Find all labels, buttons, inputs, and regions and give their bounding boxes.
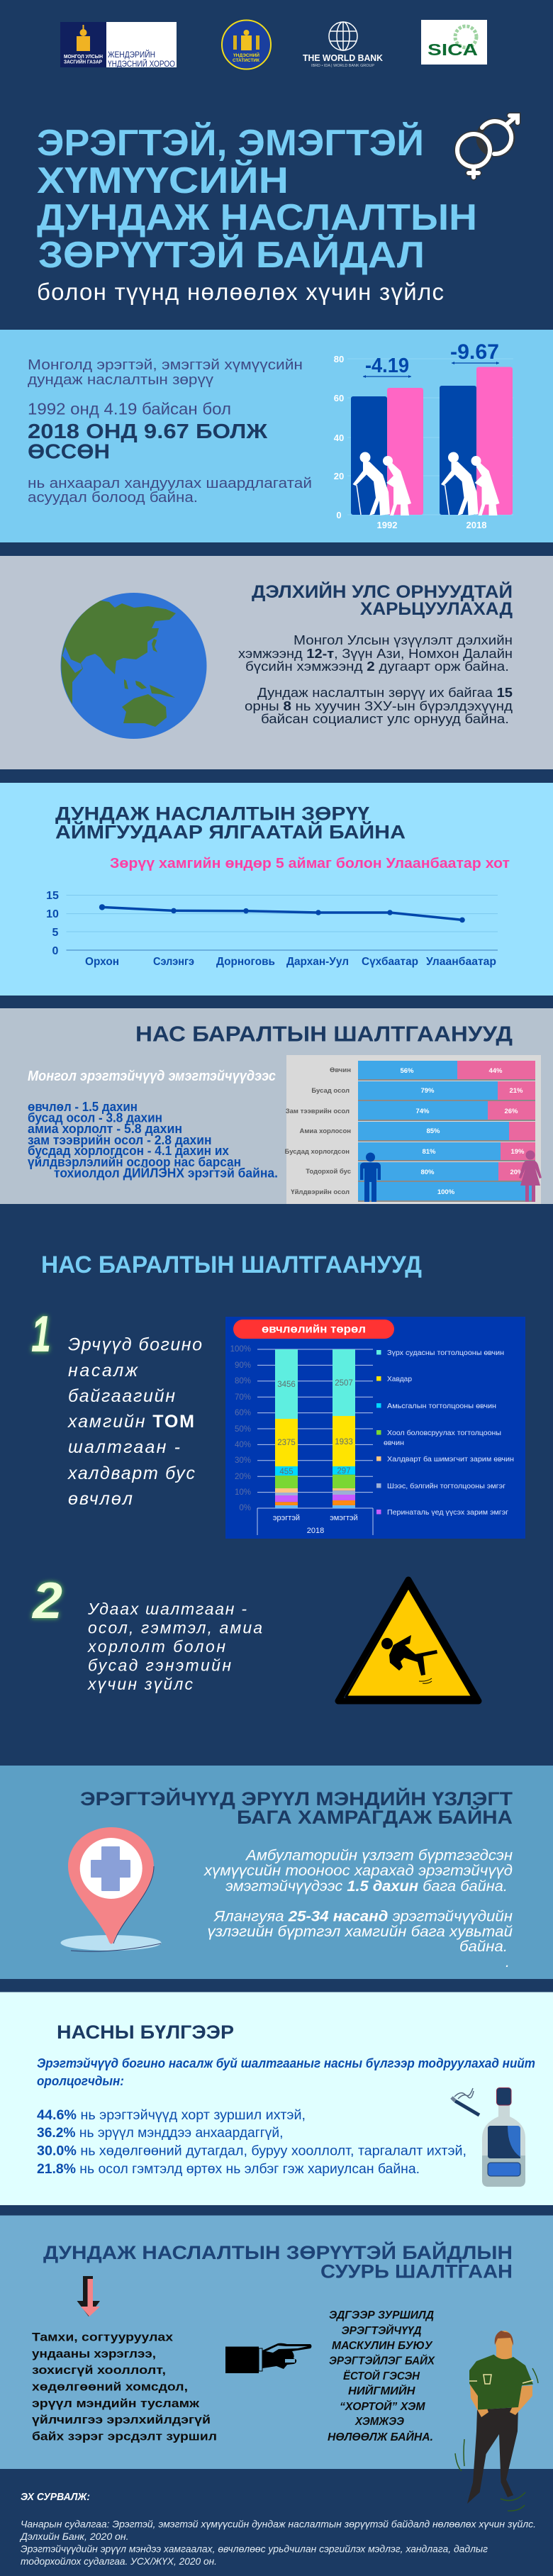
logo: gender committee xyxy=(60,22,177,69)
stacked chart: disease types: 50% xyxy=(235,1425,251,1434)
bar chart: share of deaths by sex xyxy=(285,1055,542,1204)
stacked chart: disease types: 60% xyxy=(235,1409,251,1417)
arrow: down xyxy=(77,2276,100,2316)
panel: world comparison xyxy=(0,556,553,769)
stacked chart: disease types: 70% xyxy=(235,1393,251,1402)
list: ratios: бусад осол - 3.8 дахин xyxy=(28,1110,162,1125)
text: reason one: шалтгаан - xyxy=(68,1437,180,1457)
text: reason one: байгаагийн xyxy=(68,1386,175,1406)
text block: world ranking: орны 8 нь хуучин ЗХУ-ын бүрэлдэхүүнд xyxy=(245,699,513,713)
line chart: gap by aimag: 15 xyxy=(46,890,59,902)
legend: disease types xyxy=(376,1349,514,1517)
title: ЗӨРҮҮТЭЙ БАЙДАЛ xyxy=(38,234,425,276)
text: source list: тодорхойлох судалгаа. УСХ/ЖҮХ, 2020 он. xyxy=(21,2555,217,2567)
heading: causes of death dark section: НАС БАРАЛТЫН ШАЛТГААНУУД xyxy=(41,1251,422,1278)
stacked chart: disease types: 3456 xyxy=(277,1381,296,1389)
bar chart: share of deaths by sex: Тодорхой бус xyxy=(306,1168,351,1176)
text: masculinity norms: ЁСТОЙ ГЭСЭН xyxy=(343,2368,420,2382)
heading: world comparison xyxy=(252,581,513,619)
icon: woman xyxy=(519,1150,542,1202)
label: disease type pill xyxy=(233,1320,394,1339)
text: reason two xyxy=(87,1600,262,1693)
heading: health checks: ЭРЭГТЭЙЧҮҮД ЭРҮҮЛ МЭНДИЙН ҮЗЛЭГТ xyxy=(80,1788,513,1810)
heading: aimag differences: ДУНДАЖ НАСЛАЛТЫН ЗӨРҮҮ xyxy=(55,803,370,824)
text: age group intro xyxy=(37,2056,535,2088)
text block: gap intro: 2018 ОНД 9.67 БОЛЖ xyxy=(28,420,268,443)
list: risk percentages: 36.2% нь эрүүл мэнддээ анхаардаггүй, xyxy=(37,2126,284,2141)
text block: gap intro xyxy=(28,357,312,506)
line chart: gap by aimag: 10 xyxy=(46,908,59,920)
legend: disease types: Перинаталь үед үүсэх зарим эмгэг xyxy=(387,1508,508,1517)
logo: gender committee: ЖЕНДЭРИЙН xyxy=(108,49,155,60)
list: ratios: амиа хорлолт - 5.8 дахин xyxy=(28,1122,182,1136)
list: ratios: зам тээврийн осол - 2.8 дахин xyxy=(28,1133,211,1147)
panel: root causes xyxy=(0,2215,553,2469)
bar chart: share of deaths by sex: 80% xyxy=(420,1169,435,1176)
label: disease type pill: өвчлөлийн төрөл xyxy=(262,1323,366,1336)
stacked chart: disease types: 0% xyxy=(239,1504,251,1512)
icon: elderly couple 2018 xyxy=(441,452,499,515)
stacked chart: disease types: 90% xyxy=(235,1361,251,1370)
numeral 1: 1 xyxy=(31,1306,51,1363)
text: health check details: Ялангуяа 25-34 насанд эрэгтэйчүүдийн xyxy=(213,1909,513,1924)
line chart: gap by aimag: 5 xyxy=(52,927,59,939)
illustration: standing man xyxy=(455,2331,538,2511)
list: ratios: өвчлөл - 1.5 дахин xyxy=(28,1100,138,1114)
text: age group intro: Эрэгтэйчүүд богино насалж буй шалтгааныг насны бүлгээр тодруулахад нийт xyxy=(37,2056,535,2070)
stacked chart: disease types: 2507 xyxy=(335,1379,353,1388)
heading: causes of death: НАС БАРАЛТЫН ШАЛТГААНУУД xyxy=(135,1021,513,1047)
line chart: gap by aimag: Орхон xyxy=(85,956,119,968)
stacked chart: disease types: 455 xyxy=(279,1468,294,1476)
text: masculinity norms: МАСКУЛИН БУЮУ xyxy=(332,2340,433,2352)
bar chart: share of deaths by sex: 26% xyxy=(504,1108,518,1115)
legend: disease types: өвчин xyxy=(384,1439,404,1447)
bar chart: share of deaths by sex: 85% xyxy=(426,1127,440,1135)
list: ratios xyxy=(28,1100,278,1180)
bar chart: life expectancy by sex: 1992 xyxy=(377,520,397,530)
panel: aimag differences xyxy=(0,783,553,996)
text: risky habits: зохисгүй хооллолт, xyxy=(32,2363,166,2377)
text: source list: Дэлхийн Банк, 2020 он. xyxy=(19,2531,128,2542)
text block: gap intro: дундаж наслалтын зөрүү xyxy=(28,372,213,388)
list: risk percentages xyxy=(37,2108,467,2177)
text block: world ranking: Монгол Улсын үзүүлэлт дэлхийн xyxy=(294,633,513,647)
logo: SICA: SICA xyxy=(428,40,478,59)
text: masculinity norms: НӨЛӨӨЛЖ БАЙНА. xyxy=(328,2429,433,2443)
heading: aimag differences: АЙМГУУДААР ЯЛГААТАЙ БАЙНА xyxy=(55,821,406,842)
stacked chart: disease types: 100% xyxy=(230,1345,251,1354)
text: source list: Чанарын судалгаа: Эрэгтэй, эмэгтэй хүмүүсийн дундаж наслалтын зөрүүтэй байдалд нөлөөлөх хүчин зүйлс. xyxy=(21,2519,536,2530)
bar chart: life expectancy by sex: 40 xyxy=(334,433,344,443)
bar chart: share of deaths by sex: 20% xyxy=(510,1169,524,1176)
stacked chart: disease types: 20% xyxy=(235,1473,251,1481)
icon: slip warning sign xyxy=(338,1580,479,1701)
text: age group intro: оролцогчдын: xyxy=(37,2074,124,2088)
label: gap 1992: -4.19 xyxy=(365,355,409,377)
text: health check details: хүмүүсийн тооноос харахад эрэгтэйчүүд xyxy=(203,1863,513,1879)
text block: gap intro: ӨССӨН xyxy=(28,441,110,464)
text: reason two: Удаах шалтгаан - xyxy=(87,1600,247,1618)
logo: national statistics: СТАТИСТИК xyxy=(233,58,259,63)
text: risky habits: байх зэрэг эрсдэлт зуршил xyxy=(32,2429,217,2443)
bar chart: share of deaths by sex: Бусдад хорлогдсон xyxy=(285,1148,350,1156)
panel: sources xyxy=(0,2469,553,2576)
title: ДУНДАЖ НАСЛАЛТЫН xyxy=(37,197,477,238)
text: masculinity norms: “ХОРТОЙ” ХЭМ xyxy=(340,2399,425,2413)
panel: causes of death by sex xyxy=(0,1008,553,1204)
logo: SICA xyxy=(421,20,487,65)
logo: gender committee: МОНГОЛ УЛСЫН xyxy=(64,53,103,60)
text block: world ranking: Дундаж наслалтын зөрүү их байгаа 15 xyxy=(257,686,513,700)
icon: cigarette xyxy=(452,2088,479,2115)
bar: male xyxy=(275,1349,298,1508)
text: reason one: насалж xyxy=(68,1361,139,1381)
icon: medical location pin xyxy=(61,1827,162,1951)
list: risk percentages: 30.0% нь хөдөлгөөний дутагдал, буруу хооллолт, таргалалт ихтэй, xyxy=(37,2144,467,2158)
text: risky habits xyxy=(32,2330,217,2443)
logo: national statistics: ҮНДЭСНИЙ xyxy=(233,52,259,58)
logo: world bank: THE WORLD BANK xyxy=(303,52,384,63)
stacked chart: disease types: эмэгтэй xyxy=(330,1514,358,1522)
text: risky habits: Тамхи, согтууруулах xyxy=(32,2330,174,2344)
heading: health checks xyxy=(80,1788,513,1828)
stacked chart: disease types: 30% xyxy=(235,1456,251,1465)
icon: gender symbols xyxy=(457,116,518,177)
text: risky habits: үйлчилгээ эрэлхийлдэгүй xyxy=(32,2413,211,2426)
icon: globe xyxy=(61,593,207,739)
line chart: gap by aimag: Сэлэнгэ xyxy=(153,956,194,968)
bar chart: life expectancy by sex: 60 xyxy=(334,393,344,403)
bar chart: share of deaths by sex: 56% xyxy=(400,1067,414,1075)
list: risk percentages: 44.6% нь эрэгтэйчүүд хорт зуршил ихтэй, xyxy=(37,2108,306,2123)
logo: national statistics xyxy=(222,20,271,69)
logo: gender committee: ҮНДЭСНИЙ ХОРОО xyxy=(108,58,175,69)
logo: world bank xyxy=(303,22,384,68)
text: reason one xyxy=(67,1334,202,1509)
text block: gap intro: 1992 онд 4.19 байсан бол xyxy=(28,400,231,418)
logo: world bank: IBRD • IDA | WORLD BANK GROUP xyxy=(311,64,374,68)
text: health check details xyxy=(203,1848,513,1970)
text: reason two: осол, гэмтэл, амиа xyxy=(88,1618,262,1637)
bar chart: life expectancy by sex: 80 xyxy=(334,354,344,364)
bar chart: share of deaths by sex: 44% xyxy=(488,1067,503,1075)
line chart: gap by aimag: Улаанбаатар xyxy=(426,956,496,968)
text: masculinity norms: ЭРЭГТЭЙЧҮҮД xyxy=(342,2323,422,2337)
text: reason two: бусад гэнэтийн xyxy=(88,1656,231,1675)
subheading: top five aimags: Зөрүү хамгийн өндөр 5 аймаг болон Улаанбаатар хот xyxy=(110,856,510,871)
list: ratios: үйлдвэрлэлийн ослоор нас барсан xyxy=(28,1155,241,1169)
text: risky habits: ундааны хэрэглээ, xyxy=(32,2347,156,2360)
title: ХҮМҮҮСИЙН xyxy=(37,160,289,201)
text: source list: Эрэгтэйчүүдийн эрүүл мэндээ хамгаалах, өвчлөлөөс урьдчилан сэргийлэх мэдлэг, хандлага, дадлыг xyxy=(21,2543,488,2554)
text block: gap intro: Монголд эрэгтэй, эмэгтэй хүмүүсийн xyxy=(28,357,303,373)
legend: disease types: Хавдар xyxy=(387,1375,412,1383)
stacked chart: disease types: 297 xyxy=(337,1467,351,1476)
text block: world ranking: хэмжээнд 12-т, Зүүн Ази, Номхон Далайн xyxy=(238,647,513,661)
bar chart: share of deaths by sex: Зам тээврийн осол xyxy=(286,1108,350,1115)
stacked chart: disease types: 1933 xyxy=(335,1438,353,1446)
text block: world ranking: байсан социалист улс орнууд байна. xyxy=(261,712,509,726)
text: risky habits: хөдөлгөөний хомсдол, xyxy=(32,2380,188,2394)
text: health check details: . xyxy=(505,1954,510,1970)
bar chart: share of deaths by sex: 100% xyxy=(437,1188,455,1196)
text block: gap intro: асуудал болоод байна. xyxy=(28,490,198,506)
heading: world comparison: ДЭЛХИЙН УЛС ОРНУУДТАЙ xyxy=(252,581,513,602)
text: health check details: байна. xyxy=(459,1939,508,1955)
bar chart: share of deaths by sex: 21% xyxy=(509,1087,523,1095)
text: masculinity norms: ЭРЭГТЭЙЛЭГ БАЙХ xyxy=(329,2353,435,2367)
list: ratios: тохиолдол ДИЙЛЭНХ эрэгтэй байна. xyxy=(54,1166,278,1180)
numeral 2: 2 xyxy=(31,1573,62,1629)
bar chart: life expectancy by sex: 0 xyxy=(336,510,342,520)
stacked chart: disease types xyxy=(225,1317,525,1539)
line chart: gap by aimag: Сүхбаатар xyxy=(362,956,418,968)
bar chart: life expectancy by sex: 2018 xyxy=(467,520,486,530)
label: gap 2018: -9.67 xyxy=(450,340,499,364)
heading: aimag differences xyxy=(55,803,406,842)
heading: age groups: НАСНЫ БҮЛГЭЭР xyxy=(57,2022,234,2043)
icon: pointing hand xyxy=(225,2343,312,2373)
text block: gap intro: нь анхаарал хандуулах шаардлагатай xyxy=(28,476,312,491)
line chart: gap by aimag: Дорноговь xyxy=(216,956,275,968)
line chart: gap by aimag xyxy=(46,890,498,968)
text: men versus women intro: Монгол эрэгтэйчүүд эмэгтэйчүүдээс xyxy=(28,1069,276,1084)
stacked chart: disease types: 2018 xyxy=(307,1527,324,1535)
text: health check details: Амбулаторийн үзлэгт бүртгэгдсэн xyxy=(245,1848,513,1863)
text: reason one: халдварт бус xyxy=(67,1463,196,1483)
bar chart: life expectancy by sex xyxy=(334,340,513,530)
panel: health check coverage xyxy=(0,1766,553,1979)
bar chart: share of deaths by sex: 19% xyxy=(510,1148,525,1156)
text: masculinity norms xyxy=(328,2309,435,2443)
stacked chart: disease types: 10% xyxy=(235,1488,251,1497)
bar chart: share of deaths by sex: 74% xyxy=(415,1108,430,1115)
bar chart: share of deaths by sex: 79% xyxy=(420,1087,435,1095)
line chart: gap by aimag: Дархан-Уул xyxy=(286,956,349,968)
heading: root causes: СУУРЬ ШАЛТГААН xyxy=(320,2260,513,2282)
text: reason two: хорлолт болон xyxy=(87,1637,225,1656)
bar: female xyxy=(333,1349,355,1508)
heading: sources: ЭХ СУРВАЛЖ: xyxy=(21,2491,90,2503)
line chart: gap by aimag: 0 xyxy=(52,945,59,957)
stacked chart: disease types: 40% xyxy=(235,1441,251,1449)
text: health check details: үзлэгийн бүртгэл хамгийн бага хувьтай xyxy=(207,1924,513,1940)
text: health check details: эмэгтэйчүүдээс 1.5 дахин бага байна. xyxy=(225,1878,508,1895)
list: ratios: бусдад хорлогдсон - 4.1 дахин их xyxy=(28,1144,229,1158)
text: reason one: хамгийн ТОМ xyxy=(67,1412,194,1432)
bar chart: share of deaths by sex: Өвчин xyxy=(330,1066,351,1074)
text: reason one: Эрчүүд богино xyxy=(68,1334,202,1354)
panel: life expectancy gap xyxy=(0,330,553,542)
heading: root causes: ДУНДАЖ НАСЛАЛТЫН ЗӨРҮҮТЭЙ БАЙДЛЫН xyxy=(43,2241,513,2263)
text: reason two: хүчин зүйлс xyxy=(87,1675,193,1693)
text: risky habits: эрүүл мэндийн тусламж xyxy=(32,2397,200,2410)
stacked chart: disease types: 80% xyxy=(235,1377,251,1385)
text: reason one: өвчлөл xyxy=(68,1489,133,1509)
logo: gender committee: ЗАСГИЙН ГАЗАР xyxy=(64,58,102,65)
text: masculinity norms: ЭДГЭЭР ЗУРШИЛД xyxy=(329,2309,434,2321)
stacked chart: disease types: эрэгтэй xyxy=(273,1514,300,1522)
heading: world comparison: ХАРЬЦУУЛАХАД xyxy=(360,599,513,619)
icon: elderly couple 1992 xyxy=(353,452,411,515)
icon: bottle xyxy=(482,2087,525,2187)
legend: disease types: Хоол боловсруулах тогтолцооны xyxy=(387,1429,501,1437)
title: ЭРЭГТЭЙ, ЭМЭГТЭЙ xyxy=(37,122,424,164)
panel: age groups xyxy=(0,1992,553,2205)
heading: root causes xyxy=(43,2241,513,2282)
bar chart: life expectancy by sex: 20 xyxy=(334,471,344,481)
text: masculinity norms: НИЙГМИЙН xyxy=(348,2383,415,2397)
heading: health checks: БАГА ХАМРАГДАЖ БАЙНА xyxy=(237,1806,513,1828)
list: risk percentages: 21.8% нь осол гэмтэлд өртөх нь элбэг гэж хариулсан байна. xyxy=(37,2162,420,2177)
legend: disease types: Халдварт ба шимэгчит зарим өвчин xyxy=(387,1455,514,1463)
legend: disease types: Зүрх судасны тогтолцооны өвчин xyxy=(387,1349,504,1357)
logos row xyxy=(60,20,487,69)
bar chart: share of deaths by sex: Амиа хорлосон xyxy=(300,1127,351,1135)
bar chart: share of deaths by sex: Бусад осол xyxy=(311,1087,350,1095)
text: source list xyxy=(19,2519,536,2567)
icon: man xyxy=(360,1153,381,1202)
text block: world ranking xyxy=(238,633,513,726)
bar chart: share of deaths by sex: 81% xyxy=(422,1148,436,1156)
text block: world ranking: бүсийн хэмжээнд 2 дугаарт орж байна. xyxy=(245,659,509,674)
subtitle: болон түүнд нөлөөлөх хүчин зүйлс xyxy=(37,279,444,305)
legend: disease types: Шээс, бэлгийн тогтолцооны эмгэг xyxy=(387,1482,505,1490)
stacked chart: disease types: 2375 xyxy=(277,1439,296,1447)
legend: disease types: Амьсгалын тогтолцооны өвчин xyxy=(387,1402,496,1410)
bar chart: share of deaths by sex: Үйлдвэрийн осол xyxy=(291,1188,350,1196)
title xyxy=(37,122,477,276)
text: masculinity norms: ХЭМЖЭЭ xyxy=(354,2416,404,2428)
